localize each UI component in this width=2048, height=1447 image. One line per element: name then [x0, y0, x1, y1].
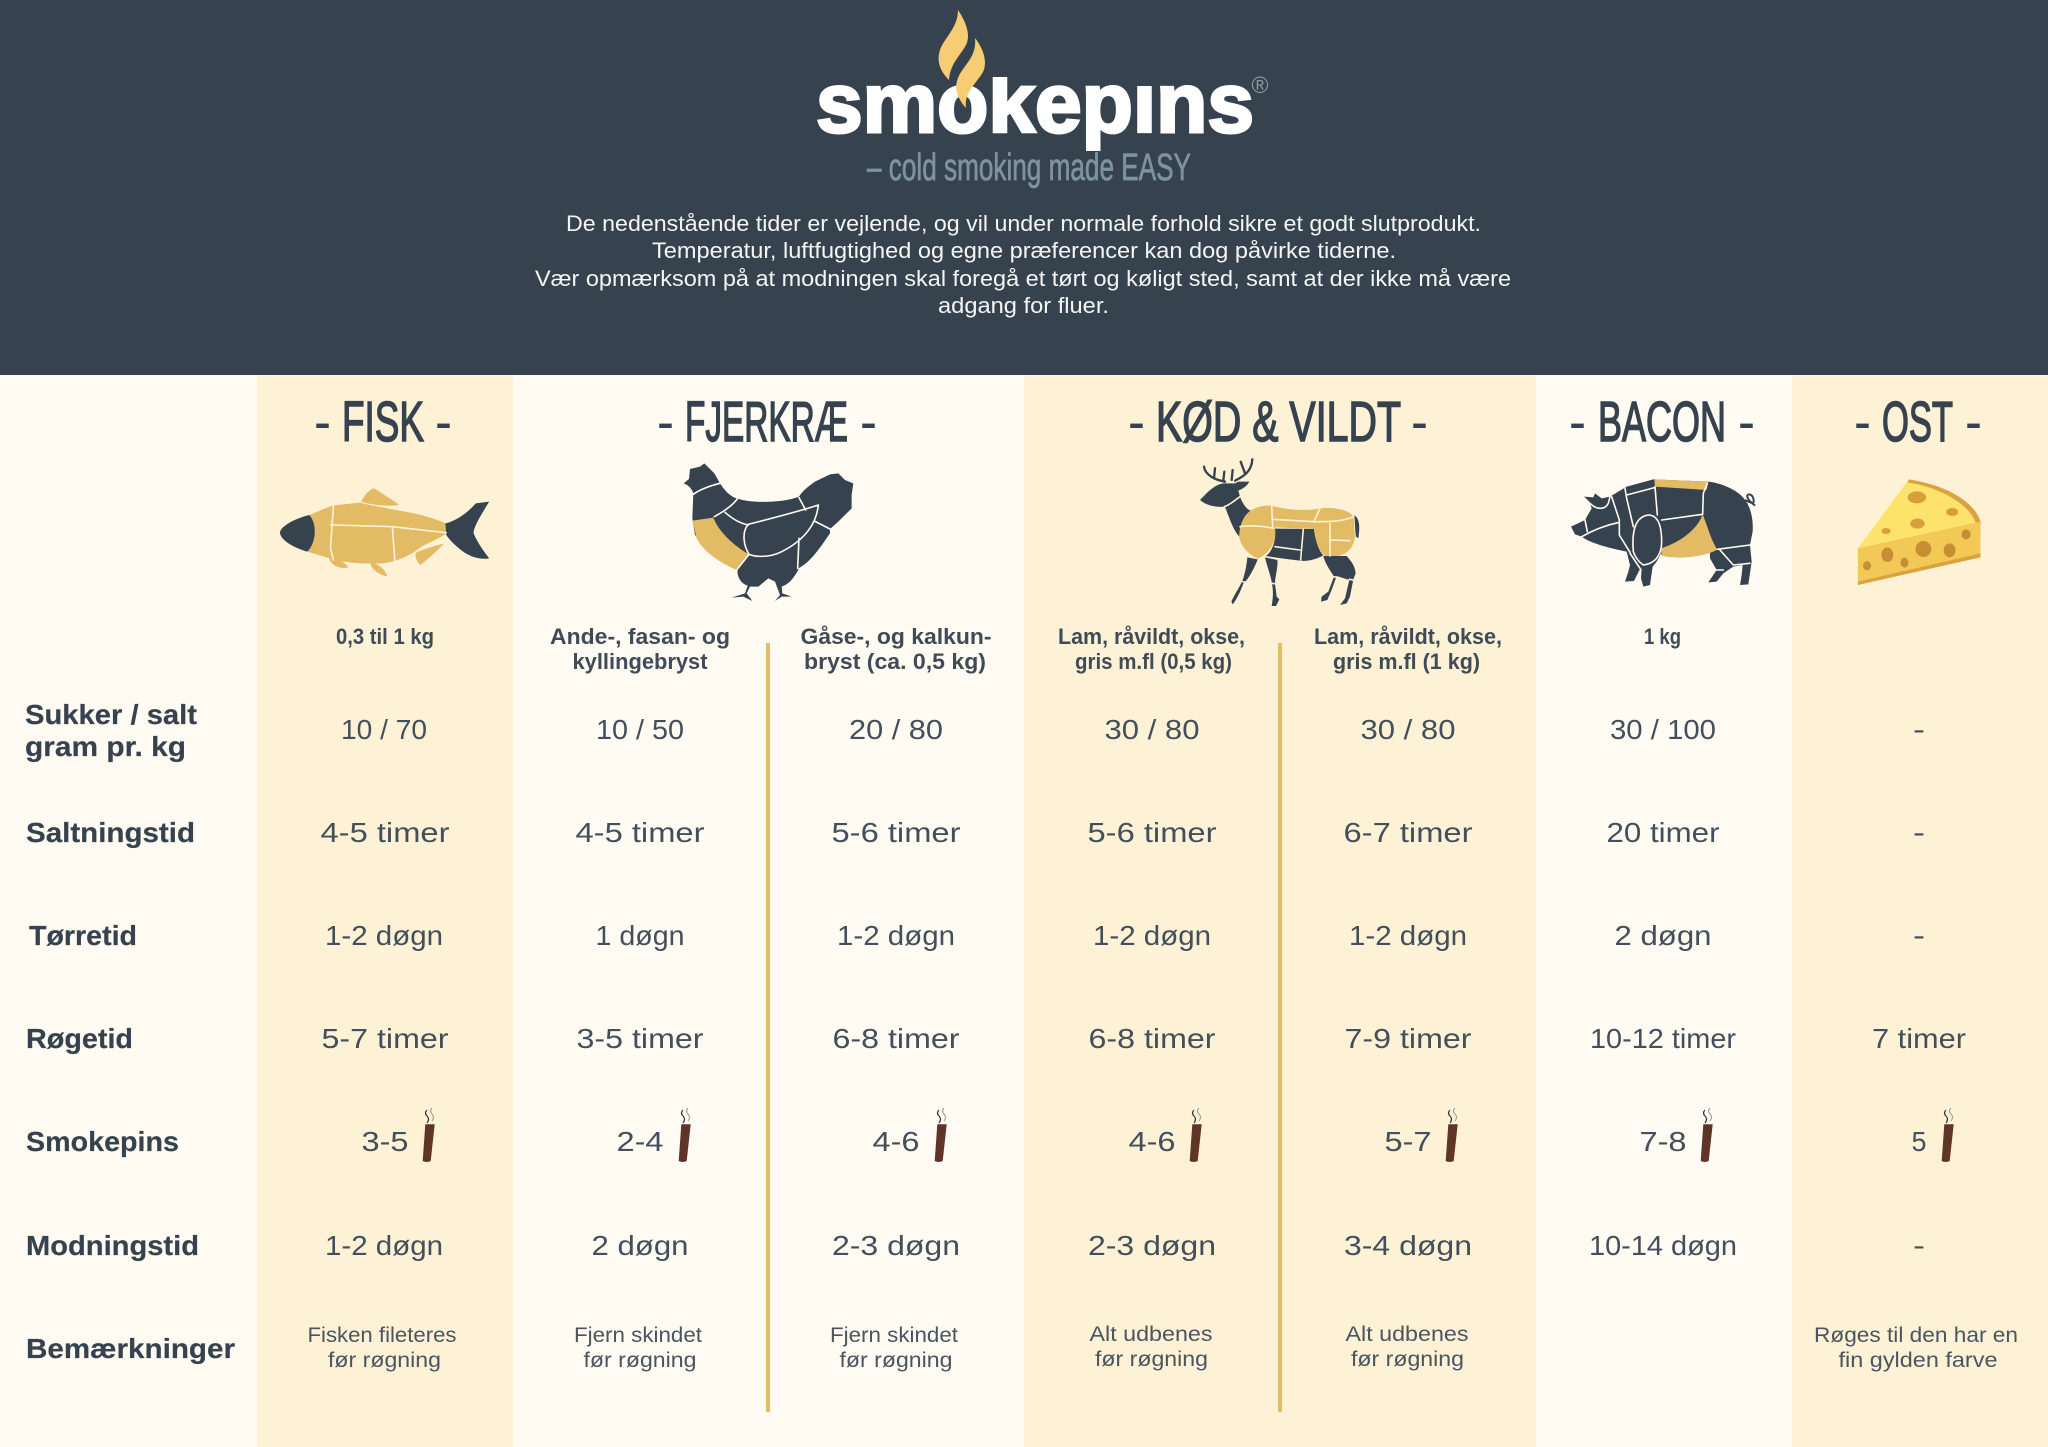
- row: smokepins: 5: [1912, 1126, 1926, 1157]
- panel: kød og vildt column: [1024, 375, 1536, 1447]
- row: modningstid: 2-3 døgn: [1088, 1230, 1216, 1261]
- row: røgetid: 6-8 timer: [832, 1023, 960, 1054]
- row: sukker / salt: 20 / 80: [849, 714, 943, 745]
- row: bemærkninger: Alt udbenes: [1346, 1323, 1468, 1346]
- row: sukker / salt: -: [1913, 714, 1925, 745]
- row: røgetid: 5-7 timer: [322, 1023, 448, 1054]
- row labels: Røgetid: [26, 1023, 133, 1054]
- row: sukker / salt: 10 / 70: [341, 714, 427, 745]
- heading: ost: [1854, 390, 1982, 454]
- column sublabels: gris m.fl (0,5 kg): [1075, 649, 1232, 674]
- row: sukker / salt: 30 / 100: [1610, 714, 1716, 745]
- intro text: adgang for fluer.: [938, 293, 1109, 318]
- row: røgetid: 7-9 timer: [1344, 1023, 1472, 1054]
- row: saltningstid: -: [1913, 817, 1925, 848]
- heading: kød og vildt: -: [1128, 390, 1145, 454]
- row: saltningstid: 4-5 timer: [576, 817, 704, 848]
- row: sukker / salt: 30 / 80: [1360, 714, 1456, 745]
- row: saltningstid: 20 timer: [1606, 817, 1720, 848]
- row: tørretid: 2 døgn: [1614, 920, 1712, 951]
- row labels: gram pr. kg: [25, 731, 186, 762]
- row: røgetid: 3-5 timer: [576, 1023, 704, 1054]
- column sublabels: [336, 624, 1681, 674]
- row labels: Modningstid: [26, 1230, 199, 1261]
- row: bemærkninger: Fjern skindet: [830, 1324, 958, 1347]
- row: modningstid: 3-4 døgn: [1344, 1230, 1472, 1261]
- icon: hen: [684, 463, 853, 601]
- column sublabels: Ande-, fasan- og: [550, 624, 730, 649]
- intro text: Temperatur, luftfugtighed og egne præferencer kan dog påvirke tiderne.: [652, 238, 1396, 263]
- row: røgetid: 10-12 timer: [1590, 1023, 1736, 1054]
- registered mark: ®: [1252, 72, 1269, 98]
- row: sukker / salt: [341, 714, 1925, 745]
- panel: ost column: [1792, 375, 2048, 1447]
- divider: kød og vildt: [1278, 643, 1282, 1412]
- row: tørretid: 1-2 døgn: [1093, 920, 1211, 951]
- heading: ost: OST: [1882, 390, 1953, 454]
- heading: ost: -: [1965, 390, 1982, 454]
- row: smokepins: 5-7: [1384, 1126, 1432, 1157]
- row labels: Saltningstid: [26, 817, 195, 848]
- column sublabels: Lam, råvildt, okse,: [1314, 624, 1502, 649]
- column sublabels: gris m.fl (1 kg): [1333, 649, 1480, 674]
- icon: cheese: [1858, 479, 1981, 585]
- tagline: – cold smoking made EASY: [867, 147, 1191, 189]
- heading: bacon: -: [1738, 390, 1755, 454]
- row labels: Bemærkninger: [26, 1333, 235, 1364]
- row: modningstid: -: [1913, 1230, 1925, 1261]
- row: sukker / salt: 30 / 80: [1104, 714, 1200, 745]
- column sublabels: 1 kg: [1644, 624, 1681, 649]
- row: bemærkninger: før røgning: [840, 1349, 952, 1372]
- page background: [0, 375, 2048, 1447]
- heading: kød og vildt: KØD & VILDT: [1156, 390, 1401, 454]
- row: tørretid: 1-2 døgn: [837, 920, 955, 951]
- row: bemærkninger: før røgning: [328, 1349, 441, 1372]
- row: saltningstid: [320, 817, 1925, 848]
- icon: pig: [1571, 479, 1755, 587]
- row: tørretid: 1 døgn: [596, 920, 684, 951]
- row: bemærkninger: fin gylden farve: [1838, 1349, 1998, 1372]
- column sublabels: 0,3 til 1 kg: [336, 624, 434, 649]
- heading: ost: -: [1854, 390, 1871, 454]
- intro text: De nedenstående tider er vejlende, og vil under normale forhold sikre et godt slutprodukt.: [566, 211, 1481, 236]
- column sublabels: kyllingebryst: [572, 649, 708, 674]
- column sublabels: Gåse-, og kalkun-: [800, 624, 992, 649]
- row: bemærkninger: Røges til den har en: [1814, 1324, 2018, 1347]
- column sublabels: bryst (ca. 0,5 kg): [804, 649, 986, 674]
- row: smokepins: [362, 1108, 1954, 1162]
- row: tørretid: [325, 920, 1925, 951]
- panel: fisk column: [257, 375, 513, 1447]
- row: smokepins: 2-4: [616, 1126, 664, 1157]
- row: bemærkninger: [308, 1323, 2018, 1372]
- heading: bacon: [1569, 390, 1755, 454]
- row: tørretid: 1-2 døgn: [325, 920, 443, 951]
- header panel: [0, 0, 2048, 375]
- intro text: Vær opmærksom på at modningen skal foregå et tørt og køligt sted, samt at der ikke må være: [535, 266, 1511, 291]
- row: bemærkninger: før røgning: [584, 1349, 696, 1372]
- divider: fjerkræ: [766, 643, 770, 1412]
- row: smokepins: 7-8: [1640, 1126, 1686, 1157]
- heading: kød og vildt: -: [1411, 390, 1428, 454]
- row: bemærkninger: Alt udbenes: [1090, 1323, 1212, 1346]
- row labels: Smokepins: [26, 1126, 179, 1157]
- heading: fjerkræ: -: [860, 390, 877, 454]
- row: saltningstid: 5-6 timer: [832, 817, 960, 848]
- column sublabels: Lam, råvildt, okse,: [1058, 624, 1245, 649]
- row: saltningstid: 4-5 timer: [320, 817, 450, 848]
- icon: fish: [280, 488, 489, 577]
- row: modningstid: 10-14 døgn: [1589, 1230, 1737, 1261]
- row: bemærkninger: før røgning: [1095, 1348, 1208, 1371]
- icon: deer: [1200, 459, 1359, 606]
- row: smokepins: 3-5: [362, 1126, 408, 1157]
- row labels: Sukker / salt: [25, 699, 197, 730]
- row: tørretid: -: [1913, 920, 1925, 951]
- row: bemærkninger: Fisken fileteres: [308, 1324, 456, 1347]
- row labels: Tørretid: [29, 920, 137, 951]
- row: sukker / salt: 10 / 50: [596, 714, 684, 745]
- row: bemærkninger: før røgning: [1351, 1348, 1464, 1371]
- heading: bacon: -: [1569, 390, 1586, 454]
- heading: fisk: -: [314, 390, 331, 454]
- row: bemærkninger: Fjern skindet: [574, 1324, 702, 1347]
- row: røgetid: 6-8 timer: [1088, 1023, 1216, 1054]
- heading: fjerkræ: [657, 390, 877, 454]
- heading: fisk: -: [435, 390, 452, 454]
- heading: bacon: BACON: [1598, 390, 1726, 454]
- heading: fisk: FISK: [342, 390, 424, 454]
- logo: [816, 10, 1269, 150]
- row: røgetid: 7 timer: [1872, 1023, 1966, 1054]
- row: tørretid: 1-2 døgn: [1349, 920, 1467, 951]
- row: smokepins: 4-6: [872, 1126, 920, 1157]
- row: saltningstid: 5-6 timer: [1088, 817, 1216, 848]
- intro text: [535, 211, 1511, 318]
- row: saltningstid: 6-7 timer: [1344, 817, 1472, 848]
- logo wordmark: smokepins: [816, 56, 1254, 150]
- icon: smoke flames: [939, 10, 985, 108]
- row: modningstid: 2-3 døgn: [832, 1230, 960, 1261]
- row: røgetid: [322, 1023, 1966, 1054]
- row labels: [25, 699, 235, 1364]
- row: smokepins: 4-6: [1128, 1126, 1176, 1157]
- heading: fjerkræ: FJERKRÆ: [685, 390, 848, 454]
- row: modningstid: 2 døgn: [592, 1230, 688, 1261]
- row: modningstid: 1-2 døgn: [325, 1230, 443, 1261]
- row: modningstid: [325, 1230, 1925, 1261]
- heading: fjerkræ: -: [657, 390, 674, 454]
